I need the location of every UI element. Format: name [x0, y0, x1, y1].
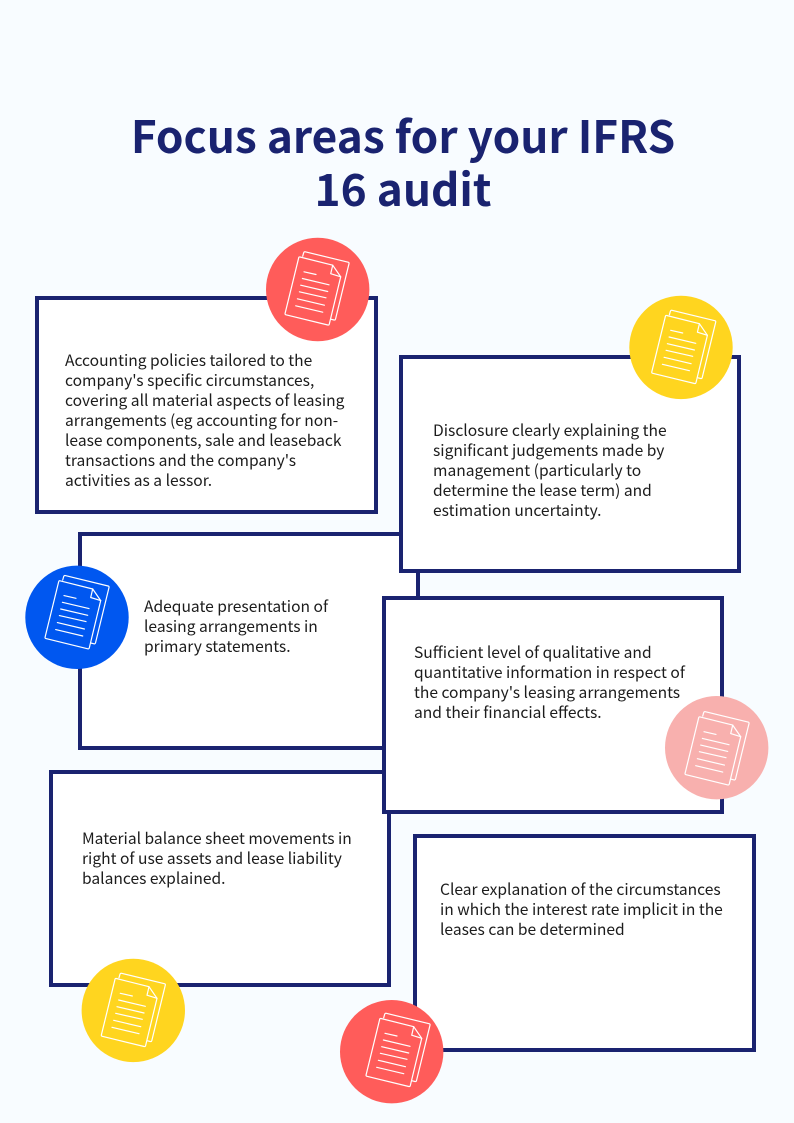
- text: balance sheet movements: [82, 826, 352, 888]
- text: qualitative and quantitative information: quantitative information in respect of: [414, 660, 685, 682]
- text: disclosure: significant judgements made by: [433, 438, 664, 460]
- text: accounting policies: transactions and the company's: [65, 448, 296, 470]
- text: interest rate implicit: Clear explanation of the circumstances: [440, 878, 721, 900]
- icon: yellow document badge top right: [629, 296, 733, 399]
- text: accounting policies: activities as a lessor.: [65, 468, 212, 490]
- text: disclosure: estimation uncertainty.: [433, 498, 601, 520]
- text: accounting policies: Accounting policies tailored to the: [65, 348, 312, 370]
- text: accounting policies: company's specific circumstances,: [65, 368, 314, 390]
- panel: accounting policies: [35, 296, 378, 514]
- text: disclosure: [433, 418, 667, 520]
- panel: interest rate implicit: [413, 834, 756, 1052]
- text: qualitative and quantitative information: Sufficient level of qualitative and: [414, 640, 652, 662]
- icon: red document badge top: [266, 238, 369, 341]
- text: adequate presentation: leasing arrangements in: [144, 614, 318, 636]
- text: adequate presentation: [144, 594, 328, 656]
- text: accounting policies: arrangements (eg accounting for non-: [65, 408, 338, 430]
- title: 16 audit: [315, 155, 491, 219]
- text: qualitative and quantitative information: and their financial effects.: [414, 700, 602, 722]
- text: disclosure: determine the lease term) and: [433, 478, 652, 500]
- text: accounting policies: [65, 348, 344, 490]
- text: disclosure: management (particularly to: [433, 458, 641, 480]
- text: accounting policies: lease components, sale and leaseback: [65, 428, 341, 450]
- title: Focus areas for your IFRS: [131, 102, 675, 166]
- text: interest rate implicit: [440, 878, 723, 940]
- text: adequate presentation: Adequate presentation of: [144, 594, 328, 616]
- text: balance sheet movements: Material balance sheet movements in: [82, 826, 352, 848]
- panel: qualitative and quantitative information: [382, 596, 724, 814]
- text: balance sheet movements: balances explained.: [82, 866, 226, 888]
- panel: adequate presentation: [78, 532, 420, 750]
- panel: disclosure: [399, 355, 741, 573]
- text: qualitative and quantitative information: the company's leasing arrangements: [414, 680, 680, 702]
- icon: blue document badge: [25, 566, 129, 669]
- panel: balance sheet movements: [49, 770, 391, 987]
- icon: red document badge bottom: [340, 1000, 443, 1103]
- text: balance sheet movements: right of use assets and lease liability: [82, 846, 342, 868]
- text: interest rate implicit: in which the interest rate implicit in the: [440, 898, 723, 920]
- text: interest rate implicit: leases can be determined: [440, 918, 625, 940]
- icon: yellow document badge bottom left: [82, 959, 185, 1062]
- text: accounting policies: covering all material aspects of leasing: [65, 388, 344, 410]
- title: [131, 102, 675, 219]
- text: disclosure: Disclosure clearly explaining the: [433, 418, 667, 440]
- icon: pink document badge: [665, 696, 768, 799]
- text: qualitative and quantitative information: [414, 640, 686, 722]
- text: adequate presentation: primary statements.: [144, 634, 291, 656]
